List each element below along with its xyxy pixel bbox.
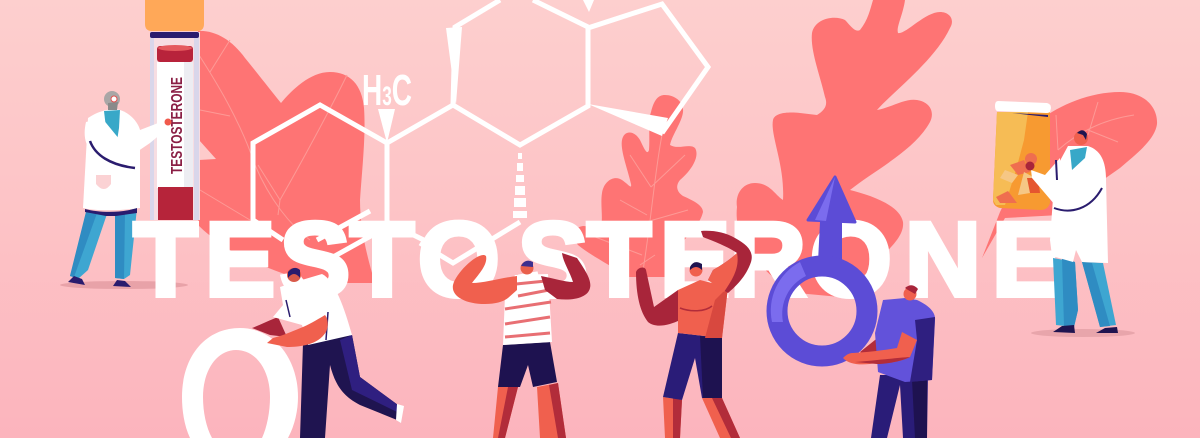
coat xyxy=(1050,146,1108,263)
scrub top xyxy=(104,110,120,141)
floor shadow xyxy=(1031,329,1135,337)
leaf: left heart-shaped xyxy=(198,31,375,283)
right arm xyxy=(541,253,590,300)
big letter O xyxy=(182,328,298,438)
wedge bonds xyxy=(378,0,668,143)
man holding male symbol xyxy=(843,285,935,438)
head xyxy=(520,262,534,274)
tube label: TESTOSTERONE xyxy=(169,77,186,174)
trousers xyxy=(300,335,398,438)
left arm xyxy=(453,255,517,304)
arm xyxy=(85,118,168,162)
shorts xyxy=(498,342,557,387)
leaf: large oak xyxy=(737,0,952,297)
shoes xyxy=(1053,325,1118,333)
floor shadow xyxy=(60,281,188,289)
doctor with test tube xyxy=(60,91,188,289)
shoes xyxy=(68,276,131,287)
arrowhead xyxy=(808,177,855,222)
striped shirt man flexing xyxy=(453,253,590,438)
torso xyxy=(678,280,728,338)
near arm xyxy=(267,315,328,347)
trousers xyxy=(1053,258,1078,327)
head xyxy=(1074,131,1088,145)
scrub collar xyxy=(1070,147,1087,170)
leaf: right xyxy=(982,92,1157,258)
methyl label: H3C xyxy=(362,66,412,115)
cap xyxy=(995,101,1051,113)
head xyxy=(104,91,120,107)
coat xyxy=(83,109,140,210)
doctor with pill jar xyxy=(1025,130,1135,337)
head xyxy=(904,288,916,300)
shoe xyxy=(396,404,404,423)
left arm xyxy=(636,268,680,326)
trousers xyxy=(70,212,107,279)
leaf: medium oak xyxy=(573,95,703,277)
trousers xyxy=(871,375,928,438)
male symbol xyxy=(771,177,867,356)
shorts xyxy=(663,333,722,400)
shirt xyxy=(875,298,935,382)
head xyxy=(287,268,301,282)
man pushing letter O xyxy=(252,268,404,438)
arm xyxy=(843,332,917,364)
ring xyxy=(777,266,867,356)
arm xyxy=(1031,158,1103,210)
main title: TESTOSTERONE xyxy=(134,202,1062,318)
back arm xyxy=(860,336,885,358)
shirt xyxy=(503,274,552,345)
raised arm xyxy=(701,231,752,293)
muscular man posing xyxy=(636,231,752,438)
legs xyxy=(663,397,740,438)
pills xyxy=(996,160,1030,203)
stem xyxy=(818,222,842,262)
head xyxy=(690,264,702,276)
shirt xyxy=(273,274,352,345)
pill jar xyxy=(993,101,1051,210)
test tube xyxy=(145,0,204,220)
hand xyxy=(1025,153,1037,165)
dashed wedge bond xyxy=(513,153,527,218)
molecule structure xyxy=(253,0,708,263)
far arm xyxy=(252,317,287,337)
legs xyxy=(493,383,566,438)
